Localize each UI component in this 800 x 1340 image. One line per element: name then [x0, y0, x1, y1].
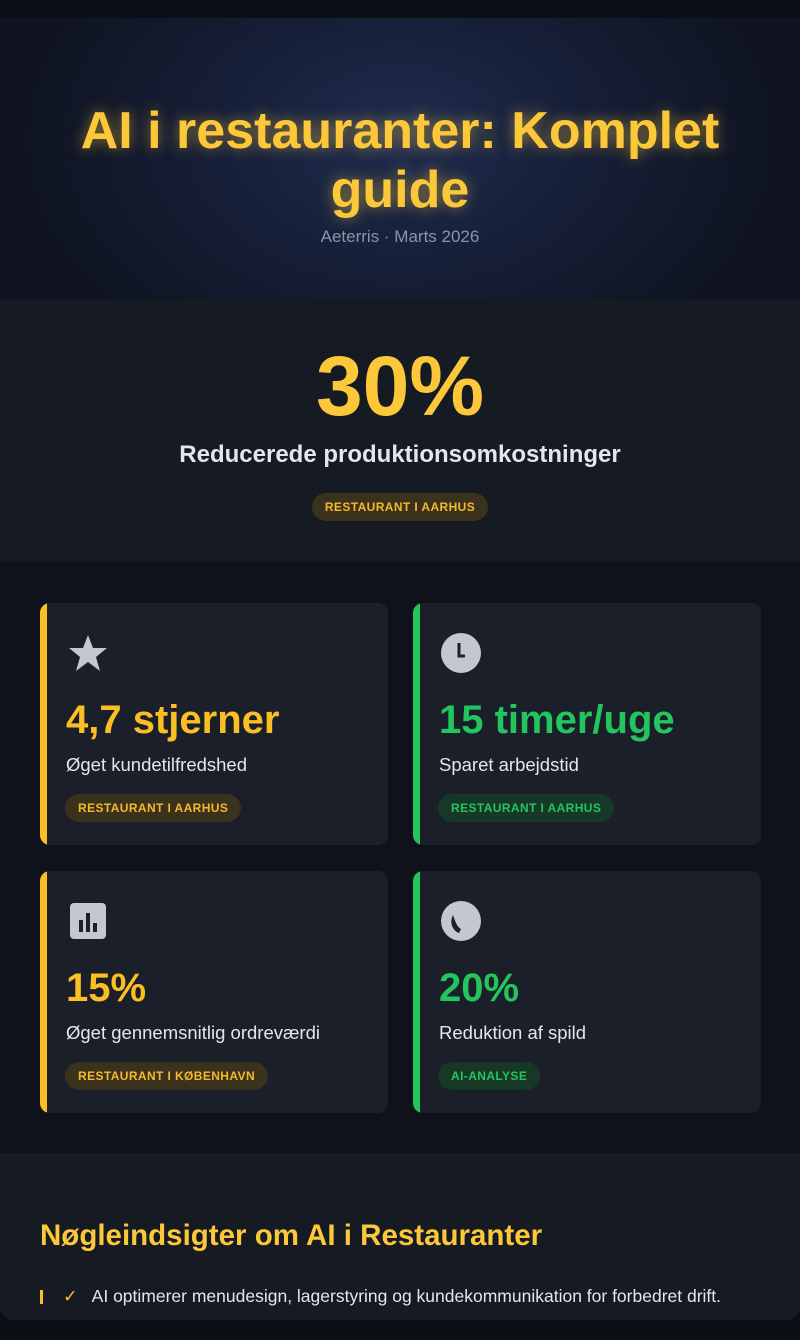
card: time: 15 timer/uge: [439, 698, 675, 742]
title: AI i restauranter: Komplet: [81, 102, 719, 160]
icon: bar chart: [70, 903, 106, 939]
card: order value: 15%: [66, 966, 146, 1010]
icon: star: [69, 635, 107, 671]
big number: 30%: [316, 339, 484, 433]
card: rating: [40, 603, 388, 845]
card: time: [413, 603, 761, 845]
card: rating: 4,7 stjerner: [66, 698, 279, 742]
card: waste: [413, 871, 761, 1113]
stat label: Reducerede produktionsomkostninger: [179, 441, 621, 468]
title: guide: [331, 161, 469, 219]
icon: clock: [441, 633, 481, 673]
panel: hero stat: [0, 300, 800, 562]
card: waste: Reduktion af spild: [439, 1022, 586, 1043]
heading: Nøgleindsigter om AI i Restauranter: [40, 1219, 542, 1252]
card: waste: 20%: [439, 966, 519, 1010]
card: order value: [40, 871, 388, 1113]
card: time: Sparet arbejdstid: [439, 754, 579, 775]
panel: key insights: [0, 1153, 800, 1320]
card: rating: RESTAURANT I AARHUS: [78, 801, 228, 815]
panel: stat grid: [0, 562, 800, 1153]
header band: [0, 18, 800, 300]
card: order value: RESTAURANT I KØBENHAVN: [78, 1069, 255, 1083]
insight item: ✓ AI optimerer menudesign, lagerstyring og kundekommunikation for forbedret drift.: [63, 1286, 721, 1306]
card: waste: AI-ANALYSE: [451, 1069, 527, 1083]
title: [76, 102, 725, 226]
card: rating: Øget kundetilfredshed: [66, 754, 247, 775]
icon: globe: [441, 901, 481, 941]
source pill: RESTAURANT I AARHUS: [325, 500, 475, 514]
card: order value: Øget gennemsnitlig ordreværdi: [66, 1022, 320, 1043]
card: time: RESTAURANT I AARHUS: [451, 801, 601, 815]
subtitle: Aeterris · Marts 2026: [321, 227, 479, 246]
